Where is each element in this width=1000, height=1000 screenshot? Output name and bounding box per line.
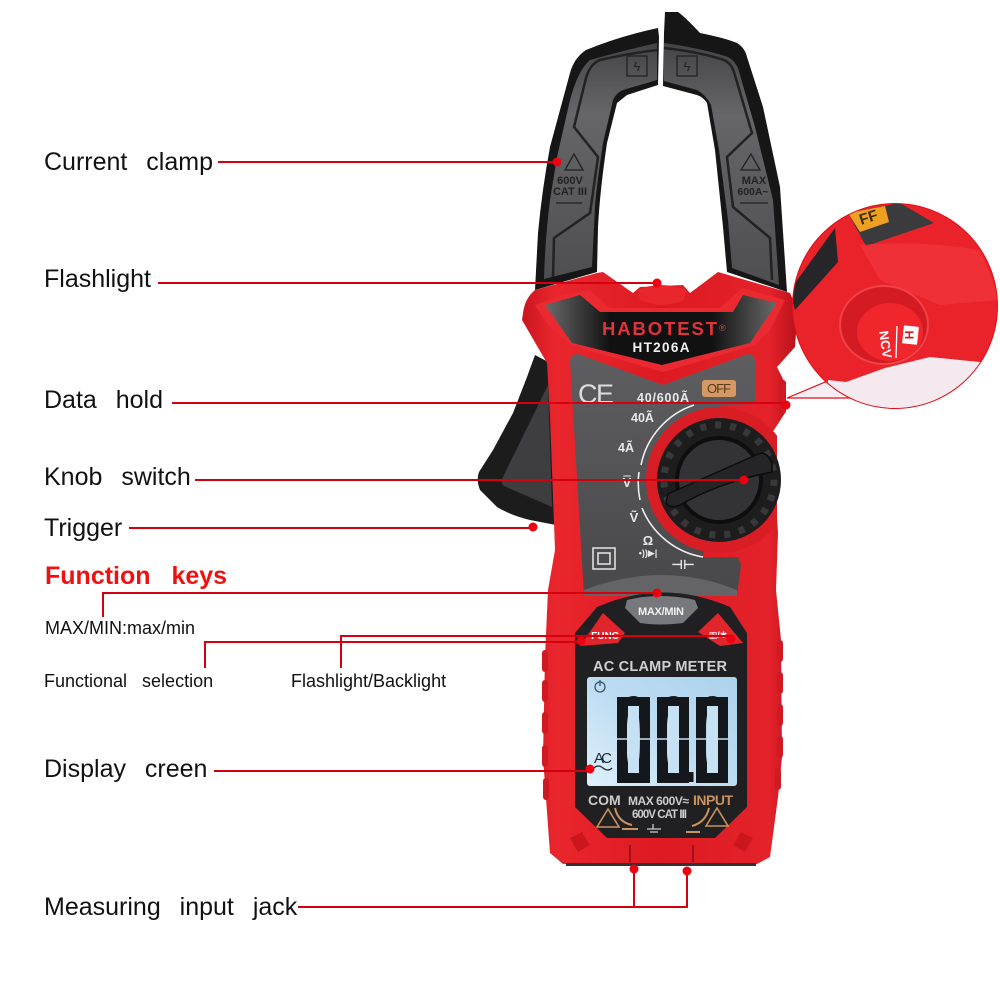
right jaw — [663, 12, 787, 292]
label: data hold: Data hold — [44, 386, 163, 414]
heading: function keys: Function keys — [45, 562, 227, 590]
label: flashlight: Flashlight — [44, 265, 151, 293]
clamp jaws: MAX — [742, 175, 767, 187]
label: max/min: MAX/MIN:max/min — [45, 618, 195, 638]
jack labels — [588, 792, 733, 832]
key: flashlight/backlight: ▥/✱ — [709, 630, 727, 640]
clamp jaws — [535, 12, 787, 292]
label: data hold — [44, 386, 790, 414]
scale arc — [638, 405, 703, 557]
clamp jaws: CAT III — [553, 186, 587, 198]
side grips — [542, 380, 786, 800]
label: flashlight — [44, 265, 662, 293]
dial labels: ⊣⊢ — [671, 557, 695, 572]
label: knob switch: Knob switch — [44, 463, 191, 491]
clamp jaws: ϟ — [634, 59, 641, 74]
readout: 0 — [615, 671, 652, 808]
label: functional selection — [44, 636, 586, 691]
label: knob switch — [44, 463, 748, 491]
label: display screen — [44, 755, 594, 783]
dial labels: 40/600Ã — [637, 390, 689, 405]
left jaw — [535, 28, 659, 290]
jaw markings — [556, 56, 768, 203]
dial labels: Ω — [643, 533, 653, 548]
LCD frame backing — [622, 702, 723, 778]
jack labels: COM — [588, 792, 621, 808]
meter title: AC CLAMP METER — [593, 659, 728, 675]
key: max/min: MAX/MIN — [638, 606, 684, 618]
key: flashlight/backlight — [698, 613, 743, 646]
dial labels: V̿ — [623, 475, 632, 490]
head plate — [535, 288, 785, 372]
readout: 0 — [655, 671, 692, 808]
dial labels: 40Ã — [631, 410, 654, 425]
trigger — [478, 355, 556, 525]
readout: 0 — [694, 671, 731, 808]
CE mark: CE — [578, 379, 614, 409]
dial panel — [570, 354, 755, 596]
dial labels: •))▶| — [639, 548, 657, 558]
LCD screen: AC — [594, 750, 612, 767]
dial labels: Ṽ — [630, 510, 639, 525]
meter body — [522, 272, 797, 866]
readout: . — [686, 722, 696, 797]
lens: hold/NCV button: NCV — [876, 330, 895, 359]
label: display screen: Display creen — [44, 755, 207, 783]
clamp jaws: ϟ — [684, 59, 691, 74]
OFF tag: OFF — [707, 381, 731, 396]
lens: hold/NCV button: H — [902, 331, 916, 339]
LCD digit counters — [617, 706, 728, 773]
key: func: FUNC — [591, 631, 619, 642]
OFF tag — [702, 380, 736, 397]
LCD screen — [587, 671, 737, 808]
brand banner — [545, 295, 777, 365]
lens: dark dial plate — [848, 203, 934, 246]
clamp jaws: 600A~ — [737, 186, 769, 198]
dial labels — [618, 390, 695, 572]
jack labels: MAX 600V≈ — [628, 794, 689, 808]
control keys and display area — [575, 592, 747, 838]
clamp jaws: 600V — [557, 175, 584, 187]
label: measuring input jack — [44, 864, 692, 921]
model: HT206A — [632, 340, 690, 355]
jack labels: 600V CAT III — [632, 809, 687, 821]
key: max/min — [625, 596, 698, 624]
label: current clamp: Current clamp — [44, 148, 213, 176]
bottom grooves — [570, 832, 753, 862]
key: func — [580, 613, 625, 646]
label: trigger: Trigger — [44, 514, 122, 542]
label: current clamp — [44, 148, 562, 176]
registered mark: ® — [719, 323, 726, 333]
lens: OFF tag — [848, 206, 889, 232]
label: flashlight/backlight — [291, 634, 736, 691]
lens: pale lower background — [828, 357, 980, 408]
brand name: HABOTEST — [602, 318, 718, 339]
callout lens: NCV / data hold — [787, 200, 1000, 412]
label: functional selection: Functional selection — [44, 671, 213, 691]
label: flashlight/backlight: Flashlight/Backlight — [291, 671, 446, 691]
dial labels: 4Ã — [618, 440, 634, 455]
jack labels: INPUT — [693, 792, 733, 808]
lens: OFF tag: FF — [857, 207, 880, 229]
rotary knob — [646, 407, 792, 553]
label: measuring input jack: Measuring input jack — [44, 893, 298, 921]
lens: black jaw section — [790, 228, 838, 310]
double insulation mark — [593, 548, 615, 569]
lens: hold/NCV button — [840, 286, 928, 364]
flashlight button — [638, 285, 686, 305]
label: trigger — [44, 514, 538, 542]
heading: function keys — [45, 562, 662, 617]
